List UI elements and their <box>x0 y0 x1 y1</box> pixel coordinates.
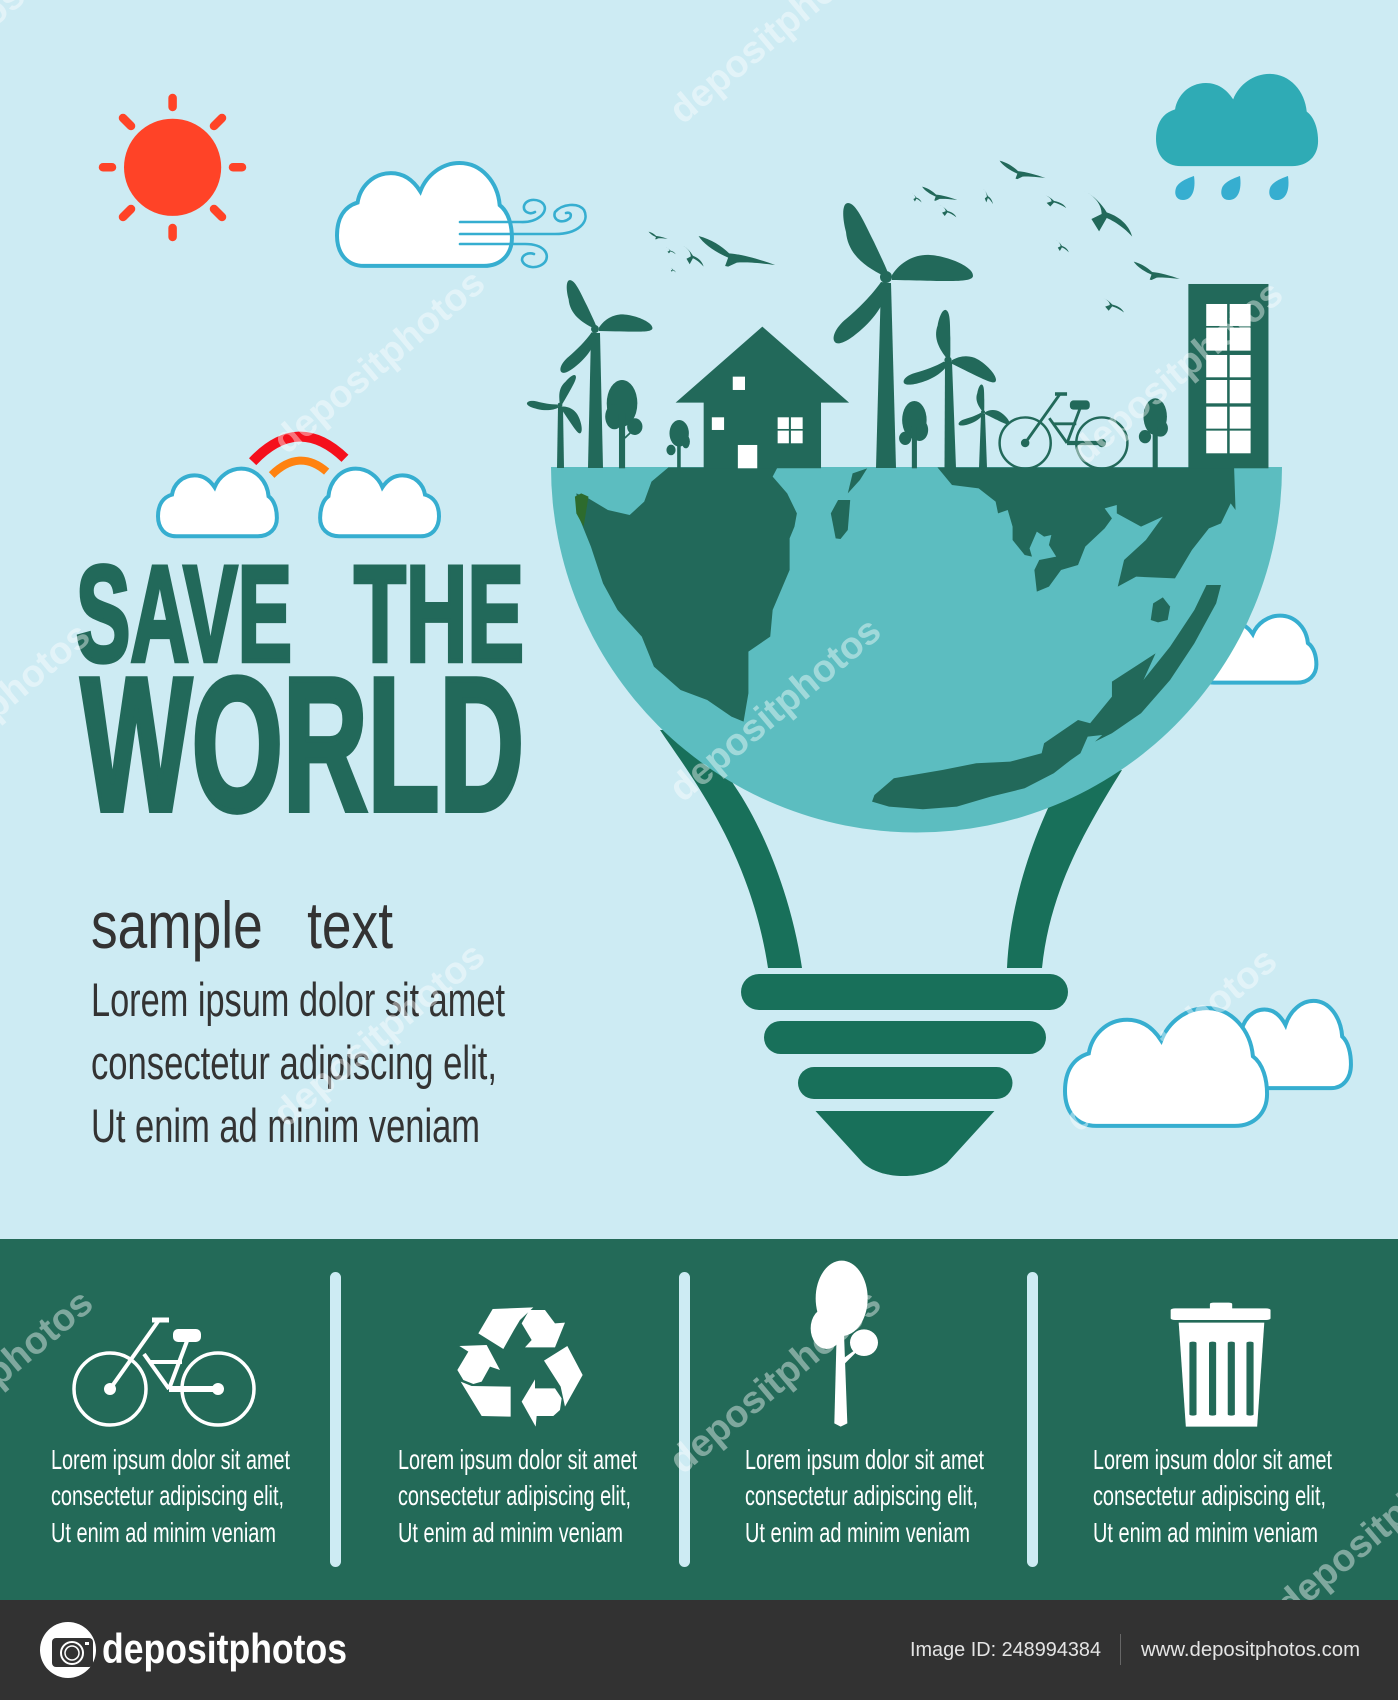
text: column 4: Ut enim ad minim veniam <box>1093 1517 1318 1548</box>
bottom right clouds <box>1065 1001 1351 1126</box>
icon: sun <box>103 98 242 237</box>
watermarks: depositphotos <box>265 935 493 1135</box>
rainbow <box>253 437 345 475</box>
text: url: www.depositphotos.com <box>1140 1639 1360 1661</box>
watermarks: depositphotos <box>265 262 493 462</box>
bulb base <box>741 974 1068 1176</box>
text: image id: Image ID: 248994384 <box>910 1639 1101 1661</box>
icon: recycle <box>457 1307 583 1427</box>
building <box>1188 284 1268 468</box>
title: SAVE <box>76 538 292 691</box>
watermarks: depositphotos <box>661 1282 889 1482</box>
panel: bottom green band <box>0 1239 1398 1600</box>
text: column 1: Lorem ipsum dolor sit amet <box>51 1444 290 1475</box>
text: column 2: Ut enim ad minim veniam <box>398 1517 623 1548</box>
text block: sample text: Ut enim ad minim veniam <box>91 1099 480 1152</box>
text: column 4 <box>1093 1444 1332 1548</box>
text: column 3 <box>745 1444 984 1548</box>
trees, house and building <box>605 284 1268 468</box>
rainbow clouds <box>158 437 439 536</box>
title <box>76 538 524 851</box>
globe <box>551 467 1282 832</box>
birds <box>649 161 1180 312</box>
text: column 1: Ut enim ad minim veniam <box>51 1517 276 1548</box>
icon: bicycle <box>74 1320 254 1425</box>
text: column 2 <box>398 1444 637 1548</box>
icon: city bicycle <box>1000 394 1127 469</box>
text block: sample text <box>91 888 505 1152</box>
text block: sample text: consectetur adipiscing elit, <box>91 1036 497 1089</box>
text: column 3: consectetur adipiscing elit, <box>745 1480 978 1511</box>
turbines <box>526 203 1019 468</box>
sky background <box>0 0 1398 1240</box>
text: column 2: consectetur adipiscing elit, <box>398 1480 631 1511</box>
continents <box>575 467 1236 809</box>
icon: wind cloud <box>337 163 586 267</box>
text block: sample text: sample text <box>91 888 393 962</box>
watermarks: depositphotos <box>1057 940 1285 1140</box>
text: column 3: Ut enim ad minim veniam <box>745 1517 970 1548</box>
title: THE <box>354 538 524 691</box>
watermarks: depositphotos <box>1063 273 1291 473</box>
watermarks: depositphotos <box>661 610 889 810</box>
text: column 2: Lorem ipsum dolor sit amet <box>398 1444 637 1475</box>
cloud behind globe <box>1195 616 1316 683</box>
icon: trash bin <box>1171 1303 1271 1427</box>
bulb stems <box>660 730 1122 968</box>
text: column 1: consectetur adipiscing elit, <box>51 1480 284 1511</box>
title: WORLD <box>81 639 524 851</box>
text block: sample text: Lorem ipsum dolor sit amet <box>91 973 505 1026</box>
icon: tree <box>811 1261 878 1427</box>
house <box>676 327 849 468</box>
panel: footer bar <box>0 1600 1398 1700</box>
city skyline <box>526 203 1268 469</box>
icon: rain cloud <box>1156 74 1318 200</box>
dividers <box>330 1272 1038 1567</box>
text: column 1 <box>51 1444 290 1548</box>
text: logo: depositphotos <box>102 1625 347 1672</box>
text: column 3: Lorem ipsum dolor sit amet <box>745 1444 984 1475</box>
icon: logo camera <box>40 1622 96 1678</box>
